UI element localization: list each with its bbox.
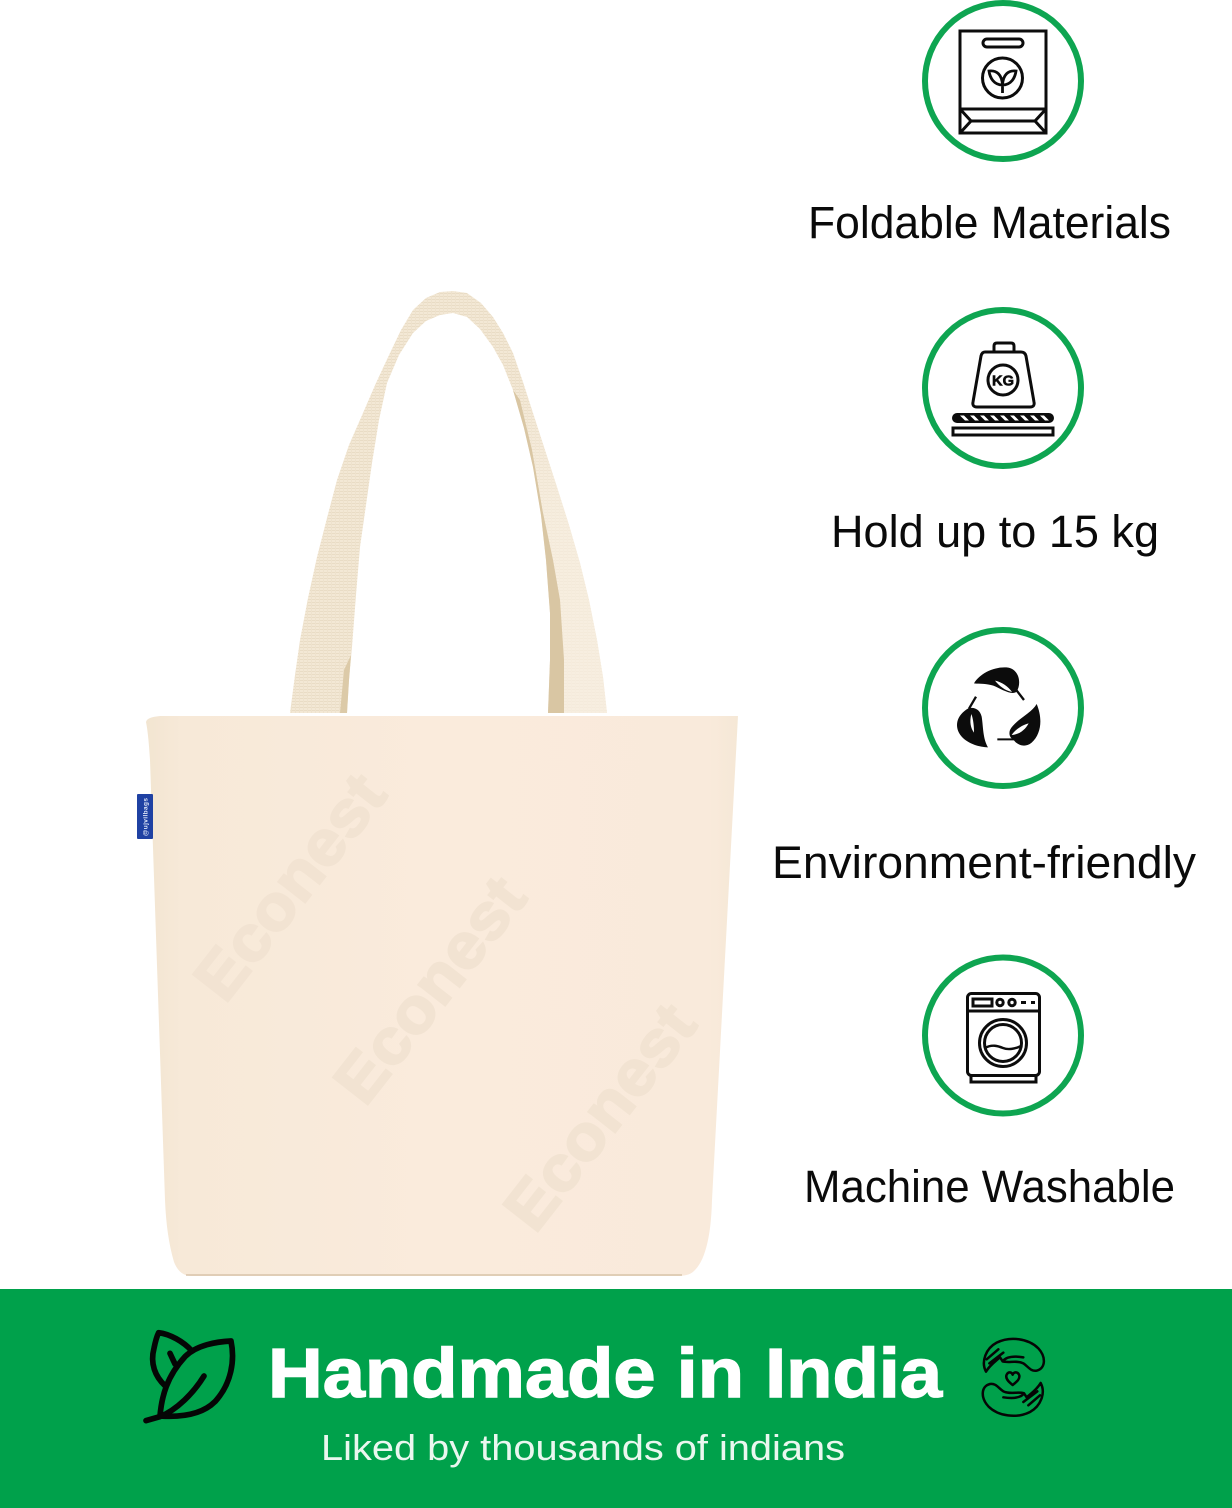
label: Hold up to 15 kg <box>831 506 1159 557</box>
icon: washing machine <box>968 994 1040 1082</box>
subheading: Liked by thousands of indians <box>321 1427 845 1468</box>
feature: Environment-friendly <box>772 630 1197 888</box>
icon: three recycling leaves <box>957 667 1040 747</box>
icon: paper bag with plant <box>960 31 1046 133</box>
handle inner shading right <box>513 390 564 713</box>
icon ring <box>925 310 1081 466</box>
icon ring <box>925 630 1081 786</box>
handle right light face <box>520 382 607 713</box>
watermark: Econest 1: Econest <box>179 760 400 1014</box>
label: Machine Washable <box>804 1161 1175 1212</box>
icon ring <box>925 3 1081 159</box>
blue side tag: @ujvilbags <box>142 798 150 836</box>
bag body <box>146 716 738 1276</box>
label: Environment-friendly <box>772 837 1197 888</box>
bag bottom seam <box>186 1274 682 1276</box>
watermark: Econest 2: Econest <box>319 863 540 1117</box>
icon: leaf <box>146 1333 233 1421</box>
handle inner shading left <box>340 655 351 713</box>
headline: Handmade in India <box>268 1334 943 1412</box>
feature: Foldable Materials <box>808 3 1171 248</box>
footer banner <box>0 1289 1232 1508</box>
label: Foldable Materials <box>808 197 1171 248</box>
feature: Machine Washable <box>804 958 1175 1212</box>
green band <box>0 1289 1232 1508</box>
bag handle <box>290 291 607 713</box>
blue side tag <box>137 794 153 839</box>
icon: KG weight on strap <box>952 343 1054 435</box>
watermark: Econest 3: Econest <box>489 990 710 1244</box>
icon: hands holding heart <box>983 1339 1044 1416</box>
feature: Hold up to 15 kg <box>831 310 1159 557</box>
icon: KG weight on strap: KG <box>992 372 1014 390</box>
bag illustration <box>137 291 738 1276</box>
icon ring <box>925 958 1081 1114</box>
